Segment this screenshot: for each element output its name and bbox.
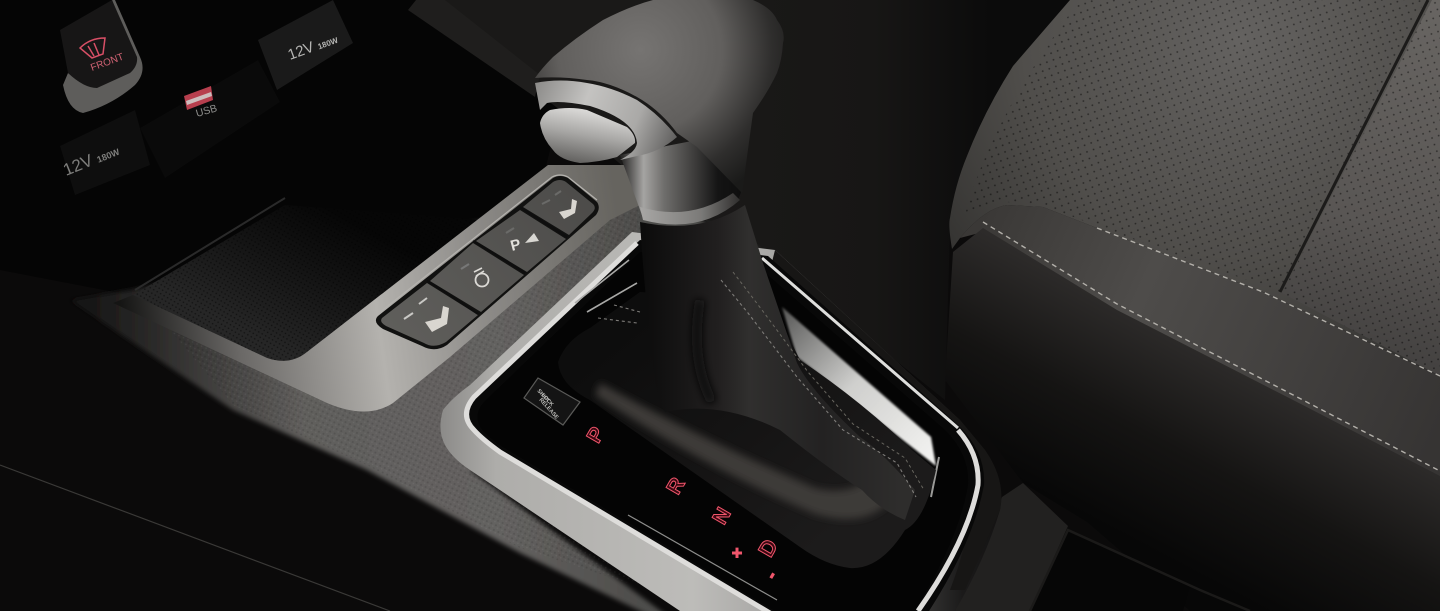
label: 12V lower: 12V 180W bbox=[60, 140, 122, 180]
seat side insert bbox=[1282, 0, 1440, 376]
gear N: N bbox=[708, 504, 736, 528]
button strip rim bbox=[376, 176, 599, 349]
perforated leather bbox=[965, 0, 1425, 292]
label: USB: USB bbox=[195, 102, 219, 120]
heat marks bbox=[474, 268, 484, 276]
carpet behind shifter bbox=[420, 0, 1075, 400]
strip top highlight bbox=[380, 175, 597, 312]
bezel lower reflection bbox=[628, 515, 777, 600]
panel: seat bbox=[945, 0, 1440, 611]
recess rim bbox=[1030, 530, 1250, 611]
console right of surround bbox=[955, 483, 1068, 611]
seat cushion bbox=[949, 0, 1440, 376]
boot stitching bbox=[721, 280, 916, 497]
console grain texture bbox=[170, 195, 650, 590]
surround shaded upper right bbox=[770, 250, 1001, 590]
defrost button bbox=[60, 0, 137, 88]
LEDs seat right bbox=[542, 191, 561, 204]
label: LOCK: LOCK bbox=[540, 392, 554, 408]
stem collar bbox=[640, 193, 740, 224]
chrome inner ring lower bbox=[466, 243, 978, 611]
seat bolster bbox=[945, 228, 1440, 611]
label: 12V upper: 12V 180W bbox=[286, 30, 340, 64]
panel: switch bank with USB bbox=[60, 0, 353, 195]
LED steering bbox=[461, 264, 469, 269]
label: FRONT: FRONT bbox=[89, 52, 125, 74]
divider grooves bbox=[427, 207, 567, 314]
button body bbox=[524, 378, 580, 425]
parking label: P bbox=[509, 236, 523, 255]
boot base bbox=[558, 292, 936, 568]
panel: gear surround bbox=[440, 232, 1001, 611]
LEDs seat left bbox=[404, 298, 427, 319]
base stitching bbox=[598, 305, 640, 323]
icon: seat left bbox=[425, 306, 449, 332]
icon: seat right bbox=[559, 199, 577, 219]
USB port bbox=[184, 86, 213, 110]
tray ridge bbox=[135, 198, 285, 290]
gear P: P bbox=[583, 423, 609, 447]
shifter metal stem bbox=[620, 140, 742, 222]
wheel bbox=[476, 274, 488, 286]
shift lock release button bbox=[524, 378, 580, 425]
12V socket upper bbox=[258, 0, 353, 90]
gloss black bezel bbox=[477, 252, 968, 611]
lower side panel seam bbox=[0, 465, 390, 611]
boot base ridge highlight bbox=[595, 383, 895, 519]
knob chrome band bbox=[535, 80, 677, 160]
bezel white reflection bbox=[782, 307, 936, 466]
panel: gear indicators bbox=[583, 423, 783, 583]
centre switch panel bbox=[140, 60, 280, 178]
gear minus: - bbox=[761, 567, 781, 583]
lower stitching bbox=[983, 222, 1440, 471]
seat crease bbox=[1280, 0, 1428, 292]
defrost button chrome bbox=[63, 0, 143, 113]
button: seat left bbox=[381, 283, 478, 346]
shift knob bbox=[535, 0, 784, 193]
knob release button bbox=[540, 108, 635, 163]
button: steering heat bbox=[430, 243, 524, 312]
label: RELEASE: RELEASE bbox=[538, 397, 560, 421]
icon: defrost bbox=[80, 38, 105, 58]
USB port highlight bbox=[186, 92, 212, 105]
surround black groove bbox=[465, 240, 984, 611]
boot stitching second row bbox=[733, 272, 924, 490]
side rail upper bbox=[408, 0, 540, 97]
chrome line upper right bbox=[762, 258, 958, 428]
mat texture bbox=[133, 205, 480, 361]
icon: steering heat bbox=[474, 268, 488, 286]
cup holder recess bbox=[1030, 532, 1190, 611]
gear boot bbox=[640, 205, 915, 520]
bezel reflection top left bbox=[575, 260, 637, 312]
upper stitching bbox=[1097, 228, 1440, 376]
button: parking sensor bbox=[476, 210, 566, 272]
panel: silver trim bbox=[113, 165, 640, 412]
parking waves bbox=[525, 233, 539, 243]
bezel edge reflection bbox=[931, 457, 939, 497]
button: seat right bbox=[523, 180, 595, 235]
gear plus: + bbox=[732, 543, 742, 563]
lit console band bbox=[70, 190, 760, 611]
storage tray mat bbox=[133, 205, 480, 361]
boot fold shadow bbox=[697, 300, 712, 402]
insert perforation bbox=[1282, 0, 1440, 376]
bolster band bbox=[960, 205, 1440, 480]
dark upper dashboard bbox=[0, 0, 560, 360]
label: SHIFT: SHIFT bbox=[536, 388, 551, 405]
panel: seat heater and parking buttons bbox=[376, 175, 599, 349]
gear R: R bbox=[662, 474, 690, 498]
12V socket lower bbox=[60, 110, 150, 195]
LED parking bbox=[506, 228, 514, 233]
gear D: D bbox=[753, 535, 783, 561]
